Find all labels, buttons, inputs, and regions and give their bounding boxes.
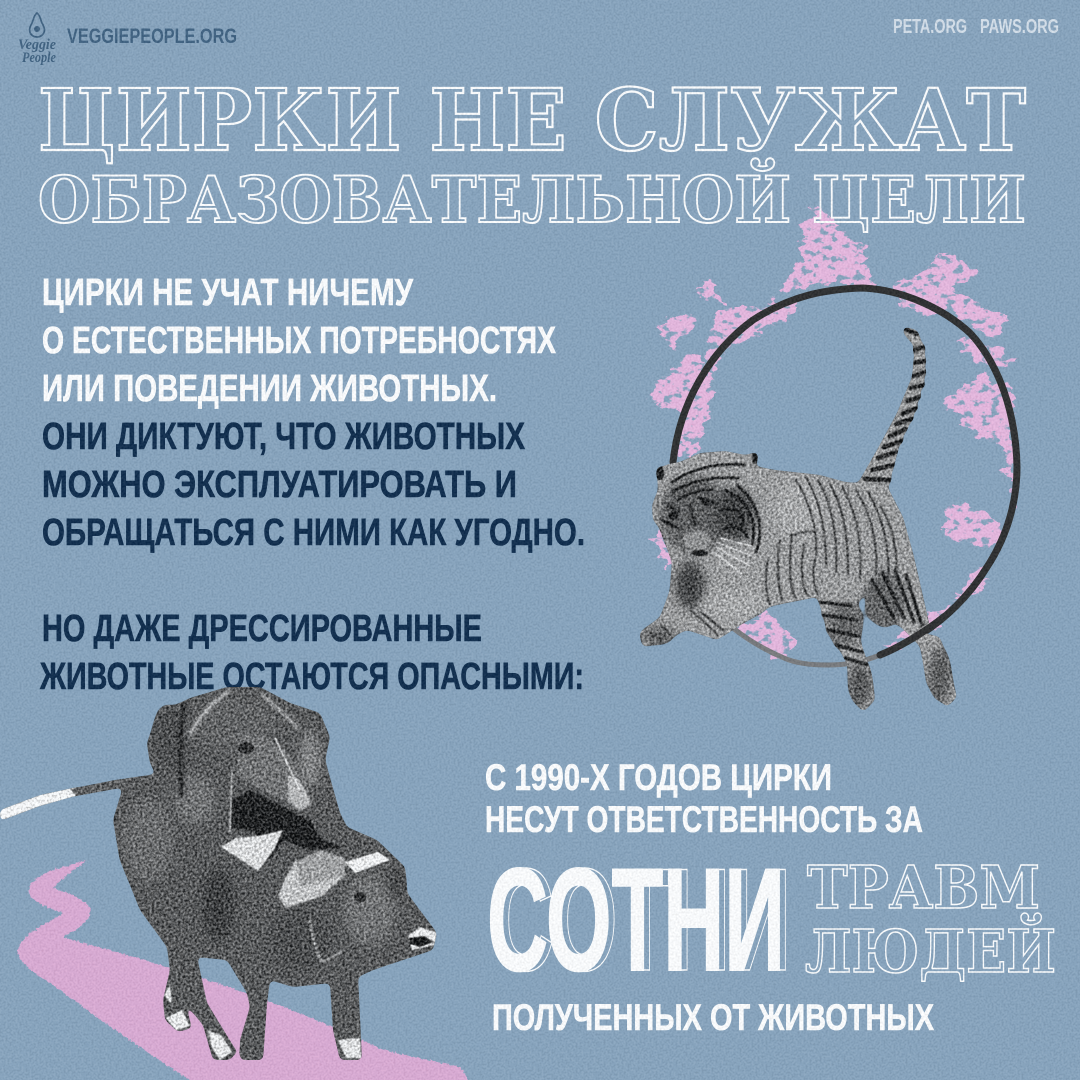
source links: PETA.ORG [893,16,967,38]
tiger paw details [650,610,725,640]
tiger eyes and mouth [656,452,758,556]
buffalo nose [408,927,437,950]
caption: since the 1990s: С 1990-Х ГОДОВ ЦИРКИ [485,757,832,798]
body text: dark statement: ОНИ ДИКТУЮТ, ЧТО ЖИВОТНЫХ [42,416,526,458]
neck shadow [232,790,344,860]
buffalo [0,687,437,1060]
body text: white intro: ИЛИ ПОВЕДЕНИИ ЖИВОТНЫХ. [42,368,497,410]
hoop front segment [880,616,945,655]
far head with muzzle [230,735,312,832]
body text: white intro: ЦИРКИ НЕ УЧАТ НИЧЕМУ [42,272,413,314]
big word: сотни [487,838,791,1001]
logo: veggie people: People [22,50,56,66]
tiger whiskers [714,538,752,574]
title: ЦИРКИ НЕ СЛУЖАТ [38,71,1026,171]
road: pink winding path [18,860,470,1080]
flames behind the hoop [648,205,1016,664]
tiger soft shading [641,477,951,707]
buffalo soft shading [123,699,403,970]
tiger silhouette [640,327,957,712]
tiger face markings [662,464,760,552]
body stripes [766,478,896,604]
rear haunch creases [181,692,298,795]
caption: since the 1990s [485,757,923,840]
logo: veggie people: VEGGIEPEOPLE.ORG [67,25,237,48]
tail stripes [865,329,925,480]
body text: dark statement: НО ДАЖЕ ДРЕССИРОВАННЫЕ [42,608,482,650]
outlined words: травм людей [805,853,1056,986]
leg stripes [820,570,922,664]
title [38,71,1026,238]
tiger [640,327,957,712]
outlined words: травм людей: ЛЮДЕЙ [805,912,1056,986]
tiger muzzle [683,530,711,550]
body text: white intro [42,272,556,410]
body text: dark statement [39,416,585,698]
source links [893,16,1059,38]
far ear [221,830,283,871]
caption: since the 1990s: НЕСУТ ОТВЕТСТВЕННОСТЬ ЗА [485,799,923,840]
outlined words: травм людей: ТРАВМ [807,853,1040,922]
big word: сотни: СОТНИ [487,838,785,1001]
body text: white intro: О ЕСТЕСТВЕННЫХ ПОТРЕБНОСТЯХ [42,320,556,362]
body text: dark statement: МОЖНО ЭКСПЛУАТИРОВАТЬ И [42,464,517,506]
tail [0,787,79,821]
logo: veggie people [18,13,237,66]
white forehead patch [345,852,390,873]
buffalo eye [354,892,366,902]
caption: from animals: ПОЛУЧЕННЫХ ОТ ЖИВОТНЫХ [492,997,934,1038]
big word: сотни: СОТНИ [493,838,791,1001]
hoop [673,288,1017,665]
hoof highlights [208,1030,232,1060]
icon: avocado [30,13,44,37]
body text: dark statement: ОБРАЩАТЬСЯ С НИМИ КАК УГОДНО. [42,512,585,554]
body text: dark statement: ЖИВОТНЫЕ ОСТАЮТСЯ ОПАСНЫМИ: [39,656,584,698]
logo: veggie people: Veggie [18,37,56,53]
buffalo silhouette [113,687,437,1060]
near ear [278,860,344,908]
rope [310,920,342,962]
title: ОБРАЗОВАТЕЛЬНОЙ ЦЕЛИ [38,158,1026,238]
striped ear [296,850,345,885]
